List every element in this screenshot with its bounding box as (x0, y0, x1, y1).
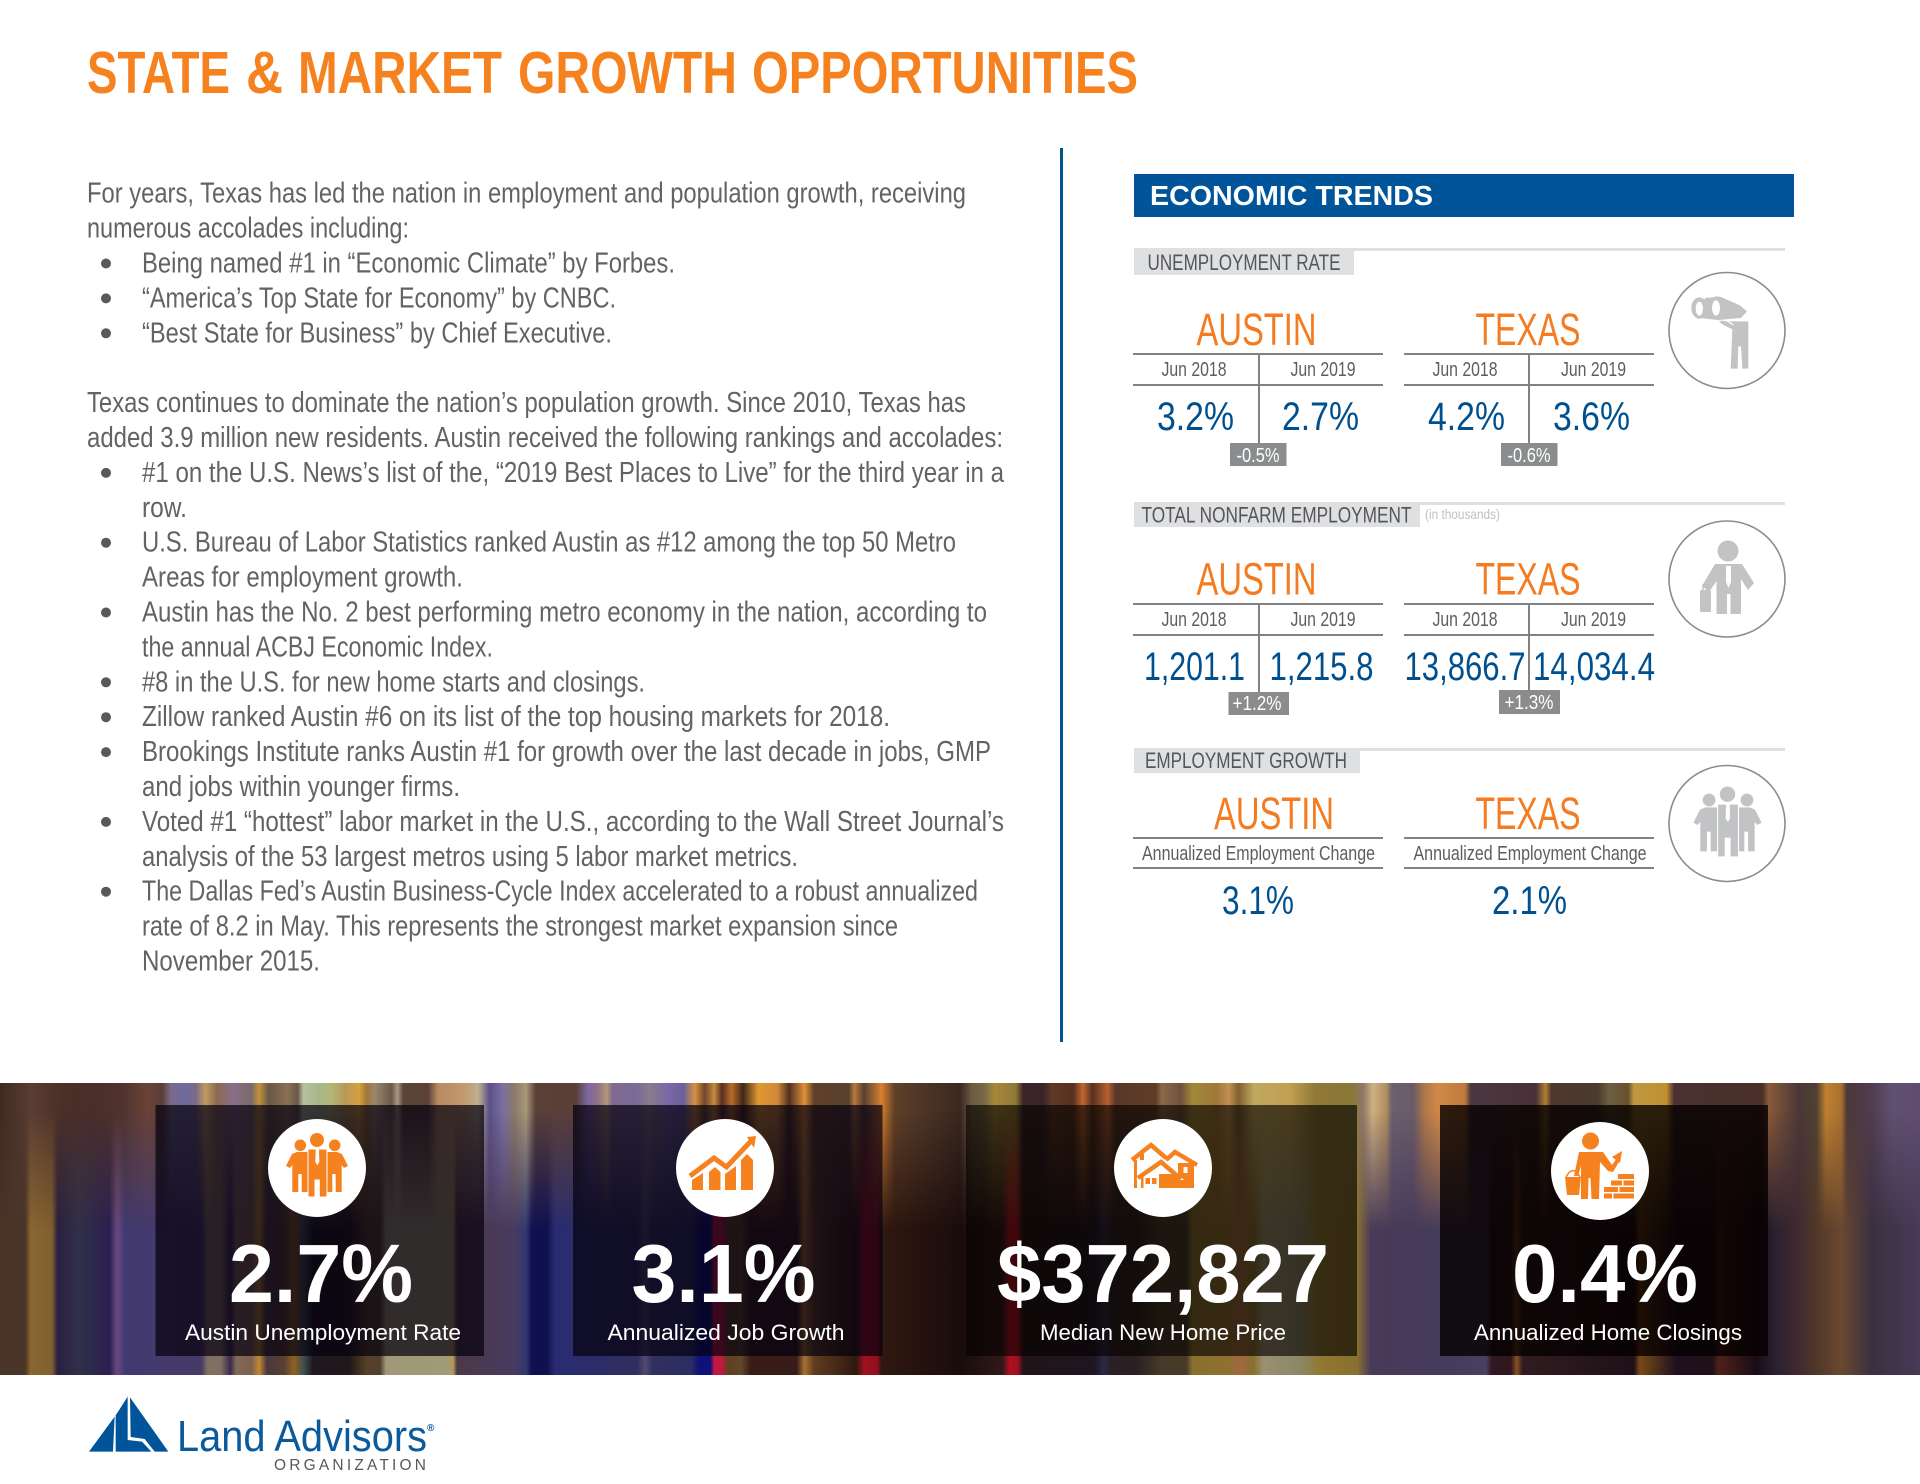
title: OPPORTUNITIES (752, 40, 1138, 106)
text block: intro and accolades (87, 178, 966, 349)
heading: economic trends (1134, 174, 1794, 217)
text block: Austin rankings and accolades: The Dallas Fed’s Austin Business-Cycle Index accelerated to a robust annualized (142, 876, 978, 908)
panel: Austin unemployment rate (156, 1105, 484, 1356)
text block: Austin rankings and accolades: Areas for employment growth. (142, 562, 463, 594)
icon: orange group of people (268, 1119, 366, 1217)
text block: Austin rankings and accolades: November 2015. (142, 946, 320, 978)
table: Texas unemployment: Jun 2019 (1561, 359, 1626, 381)
table: Austin nonfarm employment: Jun 2018 (1162, 609, 1226, 631)
panel: annualized home closings: Annualized Home Closings (1474, 1320, 1742, 1345)
table: Texas unemployment: Jun 2018 (1432, 359, 1498, 381)
section: unemployment rate: UNEMPLOYMENT RATE (1148, 250, 1340, 275)
panel: annualized home closings: 0.4% (1512, 1227, 1698, 1320)
logo: Land Advisors Organization: ORGANIZATION (274, 1457, 426, 1474)
text block: intro and accolades: For years, Texas has led the nation in employment and population growth, receiving (87, 178, 966, 210)
title: & (246, 40, 283, 106)
section: total nonfarm employment (1133, 502, 1785, 715)
section: total nonfarm employment: (in thousands) (1425, 506, 1500, 522)
panel: median new home price (966, 1105, 1357, 1356)
panel: median new home price: Median New Home Price (1040, 1320, 1286, 1345)
table: Texas unemployment: -0.6% (1508, 445, 1551, 467)
table: Austin nonfarm employment: +1.2% (1232, 693, 1282, 715)
icon: orange growth chart (676, 1119, 774, 1217)
section: unemployment rate (1133, 248, 1785, 467)
logo: Land Advisors Organization: ® (427, 1423, 435, 1434)
text block: intro and accolades: “Best State for Business” by Chief Executive. (142, 317, 612, 349)
text block: intro and accolades: numerous accolades including: (87, 213, 409, 245)
table: Austin nonfarm employment: 1,215.8 (1270, 645, 1374, 689)
title: MARKET (298, 40, 502, 106)
table: Austin employment growth: Annualized Employment Change (1142, 843, 1375, 865)
banner: blurred city lights background (0, 1083, 1920, 1375)
panel: Austin unemployment rate: 2.7% (229, 1227, 413, 1320)
logo: Land Advisors Organization: Land Advisors (177, 1412, 427, 1461)
table: Austin nonfarm employment: 1,201.1 (1144, 645, 1245, 689)
text block: Austin rankings and accolades: Austin has the No. 2 best performing metro economy in the nation, according to (142, 596, 987, 628)
table: Texas employment growth: TEXAS (1476, 788, 1580, 839)
table: Texas employment growth (1404, 788, 1654, 923)
text block: Austin rankings and accolades (87, 387, 1004, 978)
table: Austin employment growth: 3.1% (1222, 879, 1294, 923)
table: Texas unemployment (1404, 304, 1654, 467)
table: Austin nonfarm employment: AUSTIN (1196, 554, 1316, 604)
text block: Austin rankings and accolades: analysis of the 53 largest metros using 5 labor market metrics. (142, 841, 798, 873)
table: Texas nonfarm employment: 14,034.4 (1533, 645, 1655, 689)
section: total nonfarm employment: TOTAL NONFARM EMPLOYMENT (1142, 502, 1412, 528)
icon: orange bricklayer (1551, 1122, 1649, 1220)
text block: Austin rankings and accolades: Zillow ranked Austin #6 on its list of the top housing markets for 2018. (142, 701, 890, 733)
table: Texas nonfarm employment: 13,866.7 (1404, 645, 1526, 689)
text block: Austin rankings and accolades: rate of 8.2 in May. This represents the strongest market expansion since (142, 911, 898, 943)
table: Texas employment growth: Annualized Employment Change (1414, 843, 1646, 865)
table: Austin unemployment: -0.5% (1236, 445, 1280, 467)
table: Austin unemployment: Jun 2018 (1162, 359, 1226, 381)
table: Austin unemployment (1133, 304, 1383, 467)
table: Texas employment growth: 2.1% (1492, 879, 1567, 923)
table: Texas nonfarm employment: TEXAS (1476, 554, 1580, 604)
table: Austin unemployment: AUSTIN (1196, 304, 1316, 355)
table: Austin employment growth: AUSTIN (1214, 788, 1334, 839)
text block: Austin rankings and accolades: Brookings Institute ranks Austin #1 for growth over the last decade in jobs, GMP (142, 736, 991, 768)
panel: economic trends (1133, 174, 1794, 923)
icon: businessman with briefcase (1669, 521, 1785, 637)
title: GROWTH (518, 40, 737, 106)
text block: Austin rankings and accolades: Voted #1 “hottest” labor market in the U.S., according to the Wall Street Journal’s (142, 806, 1004, 838)
table: Austin nonfarm employment: Jun 2019 (1290, 609, 1356, 631)
icon: logo triangle mark (89, 1397, 168, 1452)
panel: annualized job growth: 3.1% (632, 1227, 816, 1320)
icon: orange houses (1114, 1119, 1212, 1217)
table: Austin nonfarm employment (1133, 554, 1383, 715)
text block: Austin rankings and accolades: added 3.9 million new residents. Austin received the following rankings and accolades: (87, 422, 1003, 454)
table: Texas nonfarm employment: Jun 2018 (1432, 609, 1498, 631)
text block: intro and accolades: “America’s Top State for Economy” by CNBC. (142, 282, 616, 314)
table: Texas unemployment: 3.6% (1553, 395, 1630, 439)
title (87, 40, 1138, 106)
text block: Austin rankings and accolades: #1 on the U.S. News’s list of the, “2019 Best Places to Live” for the third year in a (142, 457, 1004, 489)
text block: Austin rankings and accolades: the annual ACBJ Economic Index. (142, 631, 493, 663)
icon: person with binoculars (1669, 272, 1785, 388)
table: Texas unemployment: 4.2% (1428, 395, 1505, 439)
text block: Austin rankings and accolades: Texas continues to dominate the nation’s population growth. Since 2010, Texas has (87, 387, 966, 419)
text block: Austin rankings and accolades: #8 in the U.S. for new home starts and closings. (142, 666, 645, 698)
heading: economic trends: ECONOMIC TRENDS (1150, 180, 1433, 211)
table: Texas nonfarm employment: +1.3% (1504, 692, 1554, 714)
panel: median new home price: $372,827 (997, 1227, 1329, 1320)
text block: Austin rankings and accolades: U.S. Bureau of Labor Statistics ranked Austin as #12 among the top 50 Metro (142, 527, 956, 559)
table: Texas nonfarm employment: Jun 2019 (1561, 609, 1626, 631)
table: Austin employment growth (1133, 788, 1383, 923)
panel: annualized home closings (1440, 1105, 1768, 1356)
section: employment growth (1133, 748, 1785, 923)
panel: annualized job growth (573, 1105, 882, 1356)
title: STATE (87, 40, 230, 106)
text block: intro and accolades: Being named #1 in “Economic Climate” by Forbes. (142, 248, 675, 280)
text block: Austin rankings and accolades: and jobs within younger firms. (142, 771, 460, 803)
table: Austin unemployment: Jun 2019 (1290, 359, 1356, 381)
table: Texas unemployment: TEXAS (1476, 304, 1580, 355)
logo: Land Advisors Organization (89, 1397, 435, 1474)
table: Austin unemployment: 3.2% (1157, 395, 1234, 439)
panel: Austin unemployment rate: Austin Unemployment Rate (185, 1320, 461, 1345)
panel: annualized job growth: Annualized Job Growth (608, 1320, 844, 1345)
table: Austin unemployment: 2.7% (1282, 395, 1359, 439)
section: employment growth: EMPLOYMENT GROWTH (1145, 748, 1347, 773)
icon: group of people (1669, 766, 1785, 882)
table: Texas nonfarm employment (1404, 554, 1655, 714)
text block: Austin rankings and accolades: row. (142, 492, 187, 524)
